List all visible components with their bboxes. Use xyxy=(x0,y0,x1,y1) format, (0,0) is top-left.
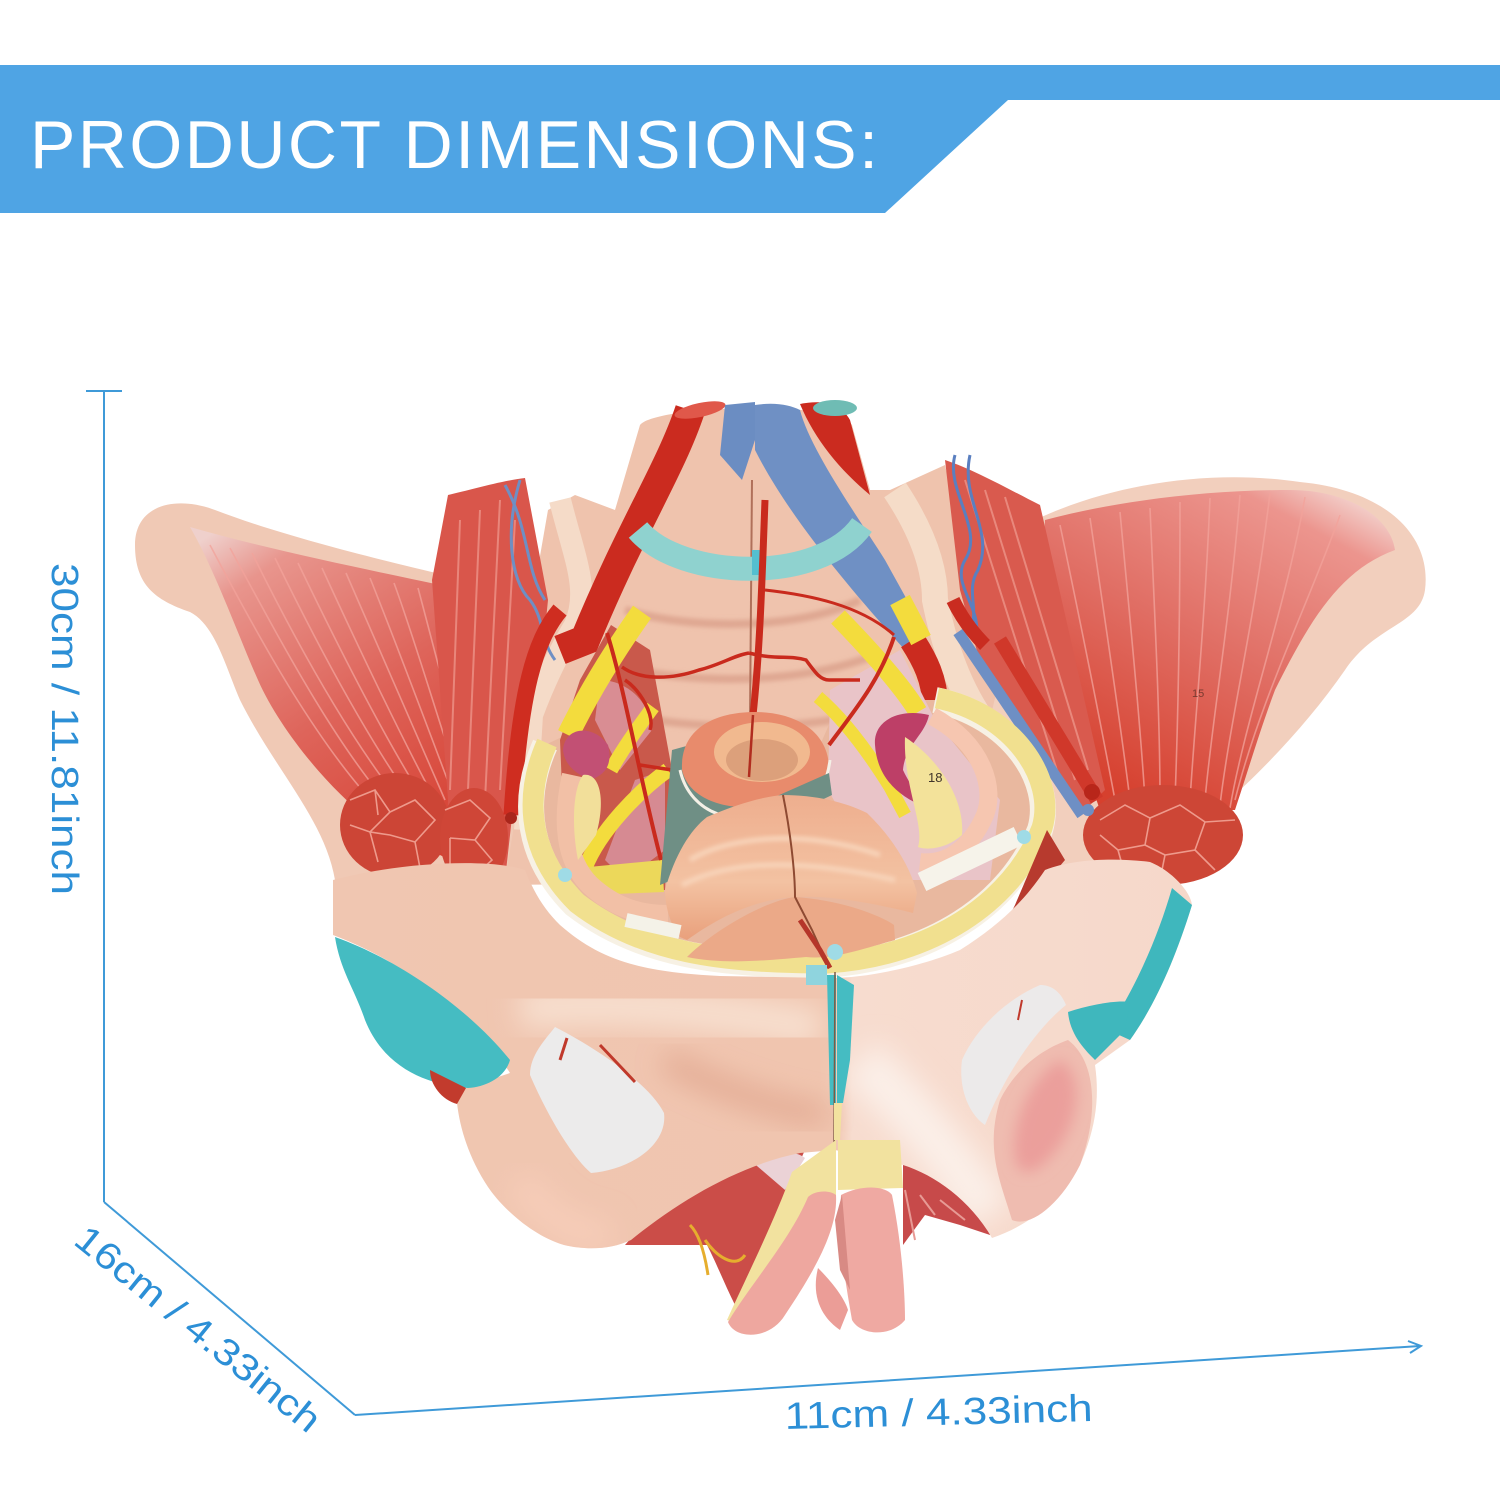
uterus and bladder xyxy=(558,795,1031,968)
left teal cartilage xyxy=(335,937,510,1088)
heading: PRODUCT DIMENSIONS: xyxy=(30,107,878,183)
left psoas muscle xyxy=(432,478,548,880)
right muscle cut end xyxy=(1083,785,1243,885)
left red muscle stub xyxy=(430,1070,466,1104)
right ovary: 18 xyxy=(928,770,942,785)
pelvic floor bowl xyxy=(531,698,1045,965)
left obturator membrane xyxy=(530,1027,664,1173)
left iliacus muscle xyxy=(190,527,500,880)
left muscle cut ends xyxy=(340,773,508,888)
right lower bone pink hollow xyxy=(994,1040,1092,1222)
rectum cross-section xyxy=(660,712,832,885)
pelvic arteries xyxy=(607,500,894,860)
front pelvic bone xyxy=(330,855,1200,1255)
top cut vessels xyxy=(560,398,935,705)
right psoas muscle xyxy=(895,460,1105,810)
height dimension line xyxy=(86,391,122,1202)
right iliac wing xyxy=(990,477,1426,880)
teal sacral disc xyxy=(638,525,862,575)
external genitalia xyxy=(727,1140,905,1335)
left cavity walls and nerves xyxy=(560,612,672,895)
sacrum and posterior wall xyxy=(500,408,1040,885)
right iliac vessels xyxy=(953,455,1100,816)
left ovary xyxy=(563,731,609,860)
height label: 30cm / 11.81inch xyxy=(43,563,85,895)
width label: 11cm / 4.33inch xyxy=(784,1388,1093,1438)
right red gap xyxy=(1005,830,1065,925)
right cavity walls and nerves xyxy=(818,617,1000,880)
pelvic cavity backdrop xyxy=(531,700,1043,965)
width dimension line with arrow xyxy=(355,1341,1421,1415)
left iliac vessels xyxy=(505,480,581,830)
perineal muscle right xyxy=(903,1147,992,1245)
right obturator membrane xyxy=(961,985,1066,1125)
perineal muscle left xyxy=(625,1150,805,1305)
anatomical pelvis model xyxy=(135,398,1426,1335)
pubic symphysis xyxy=(806,965,854,1150)
depth label: 16cm / 4.33inch xyxy=(67,1217,329,1441)
right ovary xyxy=(875,713,962,849)
right iliacus muscle: 15 xyxy=(1192,688,1204,700)
depth dimension line xyxy=(104,1202,355,1415)
right teal cartilage xyxy=(1068,888,1192,1060)
left iliac wing xyxy=(135,503,520,880)
header banner xyxy=(0,65,1500,213)
right iliacus muscle xyxy=(1040,490,1395,810)
